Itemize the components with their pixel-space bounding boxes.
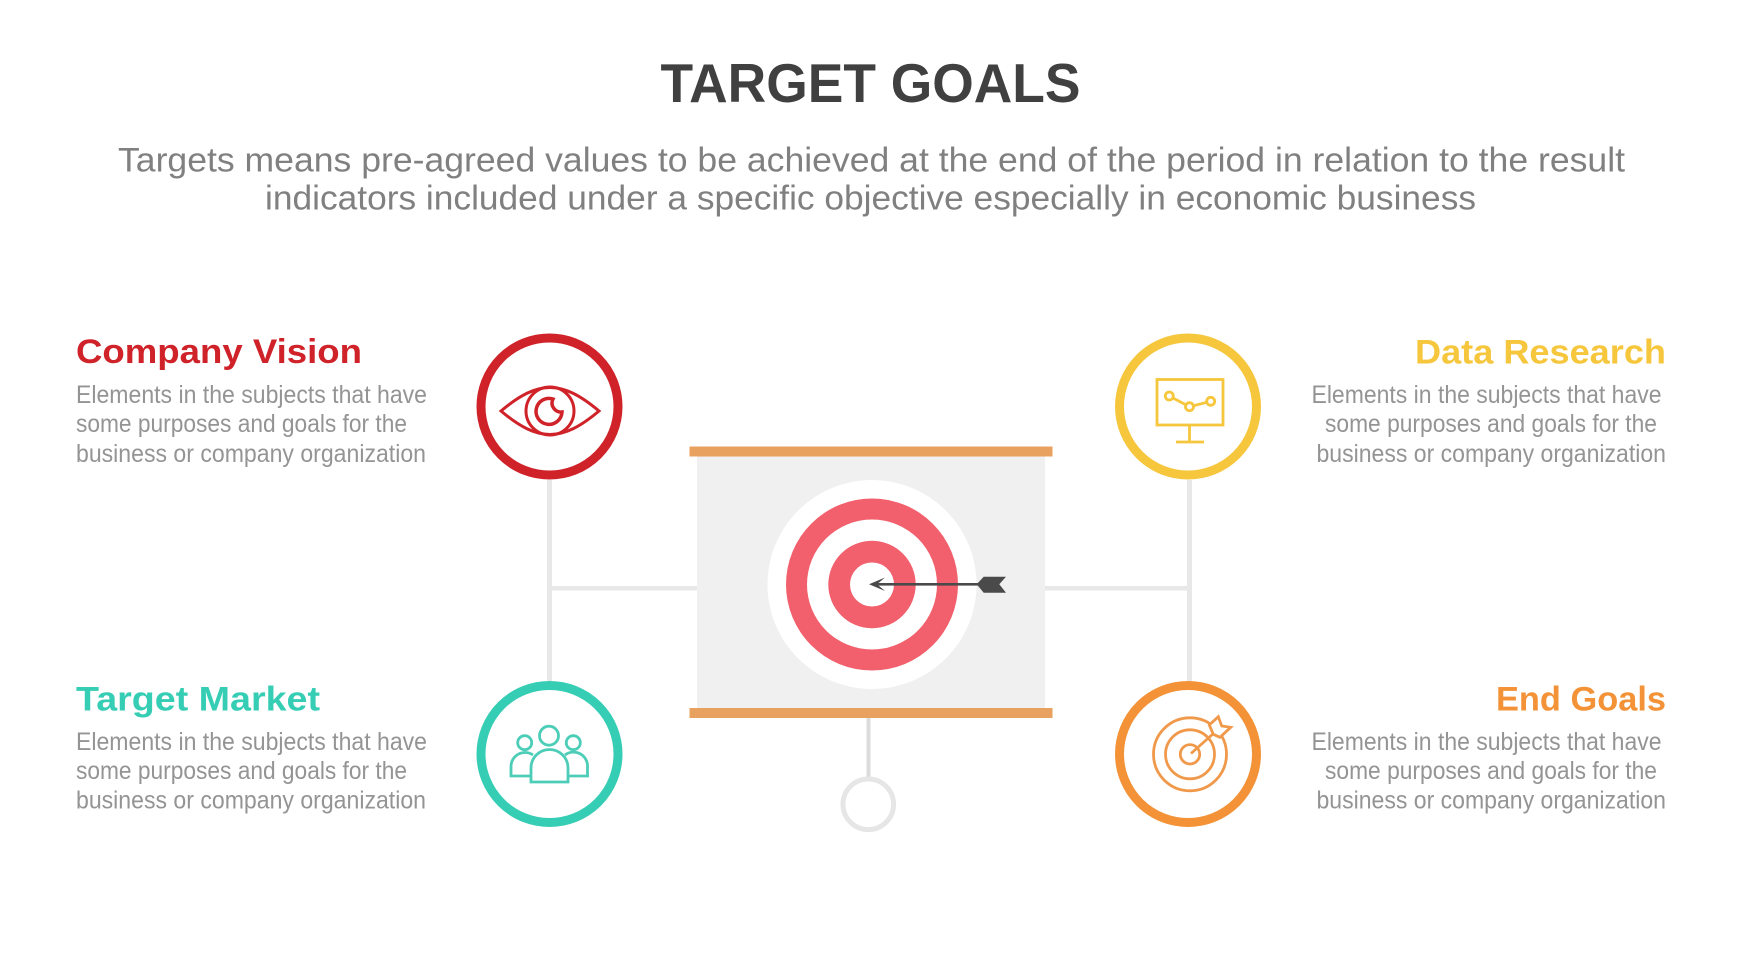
- text block: target market: some purposes and goals for the: [76, 757, 407, 785]
- text block: data research: [1312, 334, 1666, 468]
- text block: company vision: Elements in the subjects that have: [76, 381, 427, 409]
- bullseye target: [768, 480, 976, 689]
- arrow in bullseye: [869, 577, 1006, 593]
- text block: end goals: some purposes and goals for the: [1325, 757, 1657, 785]
- panel: target market icon: [481, 686, 618, 822]
- text block: target market: business or company organization: [76, 786, 426, 814]
- text block: end goals: [1312, 680, 1666, 814]
- banner pull cord: [843, 718, 894, 830]
- text block: target market: Target Market: [76, 680, 320, 718]
- panel: company vision icon: [481, 338, 618, 475]
- panel: end goals icon: [1120, 686, 1256, 822]
- text block: target market: Elements in the subjects that have: [76, 728, 427, 756]
- subtitle: Targets means pre-agreed values to be achieved at the end of the period in relation to the result: [118, 142, 1626, 180]
- text block: company vision: [76, 333, 427, 468]
- icon: eye: [501, 387, 599, 435]
- text block: company vision: business or company organization: [76, 440, 426, 468]
- icon: people group: [511, 726, 588, 782]
- text block: data research: business or company organization: [1316, 440, 1666, 468]
- text block: data research: some purposes and goals for the: [1325, 410, 1657, 438]
- icon: target with dart: [1154, 717, 1231, 791]
- text block: data research: Data Research: [1415, 334, 1666, 372]
- text block: end goals: Elements in the subjects that have: [1312, 728, 1662, 756]
- title: TARGET GOALS: [660, 52, 1080, 114]
- icon: presentation chart: [1157, 380, 1223, 442]
- panel: central banner with target: [690, 446, 1052, 718]
- text block: data research: Elements in the subjects that have: [1312, 381, 1662, 409]
- text block: end goals: End Goals: [1496, 680, 1666, 718]
- connector lines: [547, 480, 1192, 682]
- subtitle: indicators included under a specific objective especially in economic business: [265, 180, 1476, 218]
- text block: target market: [76, 680, 427, 814]
- panel: data research icon: [1120, 338, 1256, 475]
- subtitle: [118, 142, 1626, 218]
- text block: company vision: some purposes and goals for the: [76, 410, 407, 438]
- bottom roller: [690, 708, 1052, 718]
- text block: company vision: Company Vision: [76, 333, 362, 371]
- banner board: [697, 456, 1045, 709]
- text block: end goals: business or company organization: [1316, 786, 1666, 814]
- top roller: [690, 446, 1052, 456]
